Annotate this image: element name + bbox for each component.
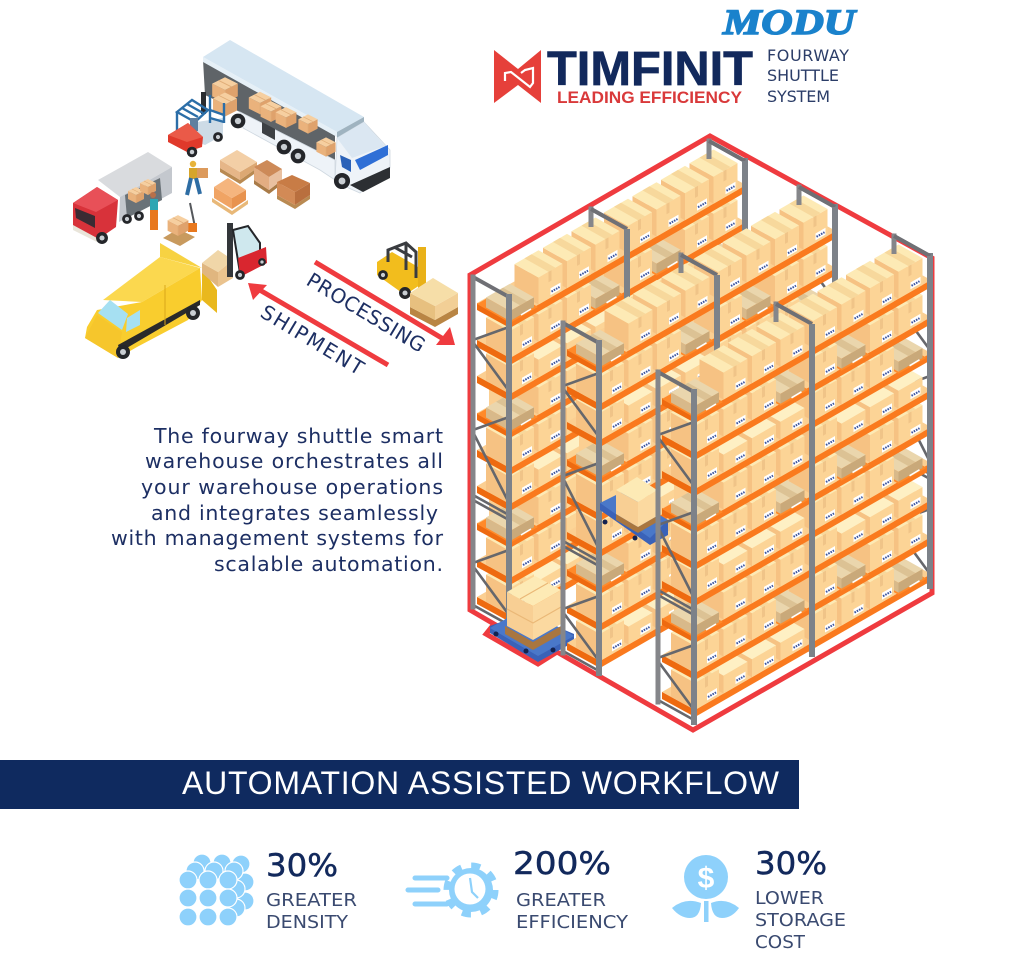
description text: warehouse orchestrates all: [145, 449, 443, 473]
stat: efficiency: [408, 846, 628, 933]
icon: gear clock: [408, 866, 495, 914]
cartons loaded by red forklift: [202, 250, 233, 287]
icon: N mark: [494, 50, 541, 103]
yellow van: [85, 243, 217, 359]
caption: EFFICIENCY: [516, 913, 628, 933]
banner background: [0, 760, 799, 809]
icon: stacked spheres: [179, 854, 254, 926]
stat: storage cost: [672, 846, 846, 953]
description text: scalable automation.: [214, 552, 443, 576]
worker at truck: [150, 192, 158, 230]
pallet jack: [163, 203, 197, 246]
logo: MODU: MODU: [722, 2, 857, 42]
tagline: LEADING EFFICIENCY: [557, 89, 742, 107]
description text: your warehouse operations: [141, 475, 443, 499]
description text: with management systems for: [111, 526, 444, 550]
caption: DENSITY: [266, 913, 348, 933]
wordmark: TIMFINIT: [547, 43, 753, 96]
rack row: middle: [563, 187, 836, 673]
red forklift: [227, 223, 267, 280]
product name: SYSTEM: [767, 87, 830, 106]
caption: GREATER: [266, 891, 357, 911]
caption: COST: [755, 933, 805, 953]
number: 30%: [755, 846, 827, 882]
illustration: logistics yard with trucks and forklifts: [73, 40, 458, 359]
blue and red forklift: [168, 92, 224, 157]
icon: money plant: $: [698, 862, 715, 895]
description text: The fourway shuttle smart: [153, 424, 443, 448]
caption: LOWER: [755, 889, 824, 909]
logo: Timfinit: [494, 43, 753, 107]
label: shipment: SHIPMENT: [256, 300, 369, 380]
carton pallets: [212, 150, 310, 215]
icon: money plant: [672, 855, 739, 922]
product name: SHUTTLE: [767, 66, 839, 85]
rack row: front: [658, 236, 931, 722]
red floor outline frame: [470, 136, 932, 730]
caption: [266, 891, 357, 933]
label: processing: PROCESSING: [302, 268, 430, 357]
caption: [755, 889, 846, 953]
white trailer truck: [203, 40, 390, 193]
description text: and integrates seamlessly: [151, 501, 438, 525]
number: 30%: [266, 848, 338, 884]
arrow: shipment: [248, 283, 388, 365]
yellow forklift with pallet: [377, 243, 458, 327]
banner title: AUTOMATION ASSISTED WORKFLOW: [182, 765, 780, 801]
rack row: back: [473, 141, 746, 627]
stat: density: [179, 848, 357, 933]
product name: [767, 46, 849, 106]
arrow: processing: [315, 262, 455, 345]
shuttle with pallet: raised: [600, 477, 668, 545]
description text: [111, 424, 444, 576]
warehouse racking illustration: [470, 136, 932, 730]
shuttle with pallet: floor: [490, 576, 574, 662]
worker carrying box: [187, 161, 208, 195]
product name: FOURWAY: [767, 46, 849, 65]
red truck: [73, 152, 172, 244]
caption: GREATER: [516, 891, 606, 911]
caption: [516, 891, 628, 933]
heading banner: [0, 760, 799, 809]
caption: STORAGE: [755, 911, 846, 931]
number: 200%: [513, 846, 611, 882]
